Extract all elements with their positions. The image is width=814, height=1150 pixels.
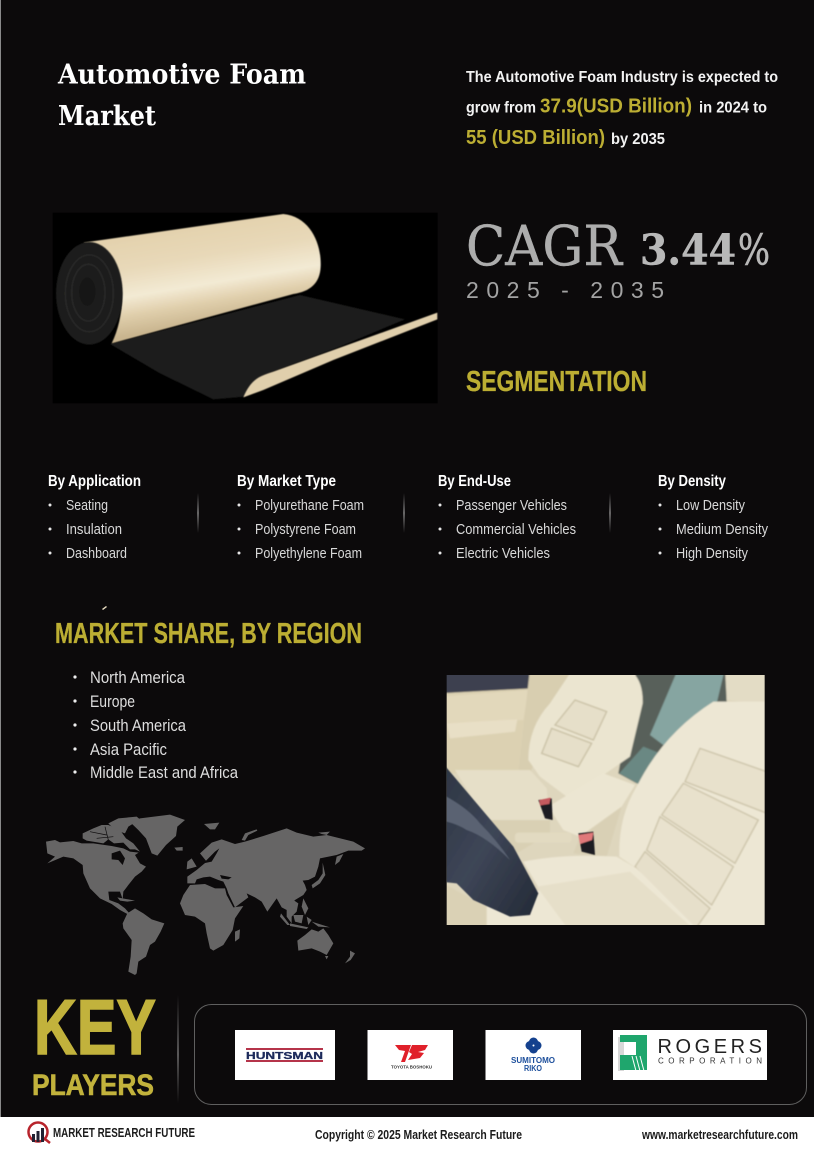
teal rear seat	[650, 675, 724, 746]
title	[57, 60, 306, 132]
foam sheet	[110, 295, 405, 399]
roll body	[83, 214, 321, 343]
key players heading: PLAYERS	[32, 1069, 154, 1102]
photo: car seats	[440, 668, 771, 932]
left seat cushion	[456, 770, 547, 820]
heading: segmentation: SEGMENTATION	[466, 366, 647, 398]
logo: Toyota Boshoku	[368, 1030, 453, 1080]
segment: by density: Medium Density	[676, 521, 768, 538]
door panel	[447, 690, 524, 773]
heading: market share by region: MARKET SHARE, BY REGION	[55, 618, 362, 650]
segment: by application: By Application	[48, 473, 141, 490]
belt buckles	[538, 798, 553, 820]
region list: North America	[90, 668, 185, 687]
armrest	[548, 773, 635, 837]
cream underside edge	[243, 313, 437, 397]
region list	[73, 668, 238, 782]
logo: Market Research Future	[28, 1122, 195, 1143]
steering wheel	[440, 760, 538, 917]
segment: by market type: By Market Type	[237, 473, 336, 490]
market forecast text: by 2035	[611, 131, 665, 148]
logo: Huntsman: HUNTSMAN	[246, 1051, 323, 1062]
right seat cushion	[486, 856, 692, 925]
segment: by market type: Polystyrene Foam	[255, 521, 356, 538]
logo: Sumitomo Riko	[486, 1030, 581, 1080]
segment: by end-use: By End-Use	[438, 473, 511, 490]
market forecast text: 37.9(USD Billion)	[540, 96, 692, 118]
segment: by market type: Polyurethane Foam	[255, 497, 364, 514]
segment: by market type: Polyethylene Foam	[255, 545, 362, 562]
region list: South America	[90, 716, 186, 735]
segment: by end-use: Passenger Vehicles	[456, 497, 567, 514]
segment: by density: High Density	[676, 545, 748, 562]
segment: by end-use: Commercial Vehicles	[456, 521, 576, 538]
segment: by application	[48, 473, 141, 562]
market forecast text: 55 (USD Billion)	[466, 127, 605, 149]
market forecast text: in 2024 to	[699, 100, 767, 116]
key players heading: KEY	[34, 983, 156, 1071]
segment: by market type	[237, 473, 364, 562]
logo: Huntsman	[235, 1030, 335, 1080]
logo: Toyota Boshoku: TOYOTA BOSHOKU	[391, 1064, 432, 1070]
key players panel	[194, 1004, 806, 1104]
title: Market	[58, 101, 156, 132]
copyright: Copyright © 2025 Market Research Future	[315, 1127, 522, 1142]
logo: Rogers Corporation	[613, 1030, 767, 1080]
market forecast text: grow from	[466, 100, 536, 116]
logo: Market Research Future: MARKET RESEARCH FUTURE	[53, 1125, 195, 1140]
key players heading	[32, 983, 156, 1102]
region list: Europe	[90, 692, 135, 711]
title: Automotive Foam	[57, 60, 306, 90]
logo: Rogers Corporation: ROGERS	[658, 1036, 762, 1058]
CAGR: 2025 - 2035	[466, 277, 664, 303]
segment: by density: By Density	[658, 473, 726, 490]
footer	[0, 1117, 814, 1150]
CAGR: CAGR	[466, 214, 623, 278]
world map	[46, 815, 365, 975]
CAGR	[466, 214, 770, 303]
segment: by application: Dashboard	[66, 545, 127, 562]
photo: foam roll	[53, 213, 438, 403]
market forecast text: The Automotive Foam Industry is expected to	[466, 69, 778, 86]
segment: by end-use: Electric Vehicles	[456, 545, 550, 562]
CAGR: 3.44	[640, 226, 736, 274]
segment: by density	[658, 473, 768, 562]
logo: Rogers Corporation: CORPORATION	[658, 1056, 762, 1066]
roll end	[56, 242, 123, 345]
segment: by application: Insulation	[66, 521, 122, 538]
region list: Middle East and Africa	[90, 763, 238, 782]
Americas and Greenland	[46, 815, 185, 975]
logo: Sumitomo Riko: SUMITOMO	[511, 1056, 555, 1065]
logo: Sumitomo Riko: RIKO	[524, 1064, 542, 1073]
segment: by end-use	[438, 473, 576, 562]
segment: by application: Seating	[66, 497, 108, 514]
region list: Asia Pacific	[90, 740, 167, 759]
segment: by density: Low Density	[676, 497, 745, 514]
right seat back	[619, 702, 771, 932]
rear dark gap	[618, 668, 727, 783]
market forecast text	[466, 69, 778, 149]
Europe, Asia, Africa, Oceania	[180, 823, 365, 963]
CAGR: %	[738, 226, 770, 274]
left seat back	[528, 668, 643, 797]
